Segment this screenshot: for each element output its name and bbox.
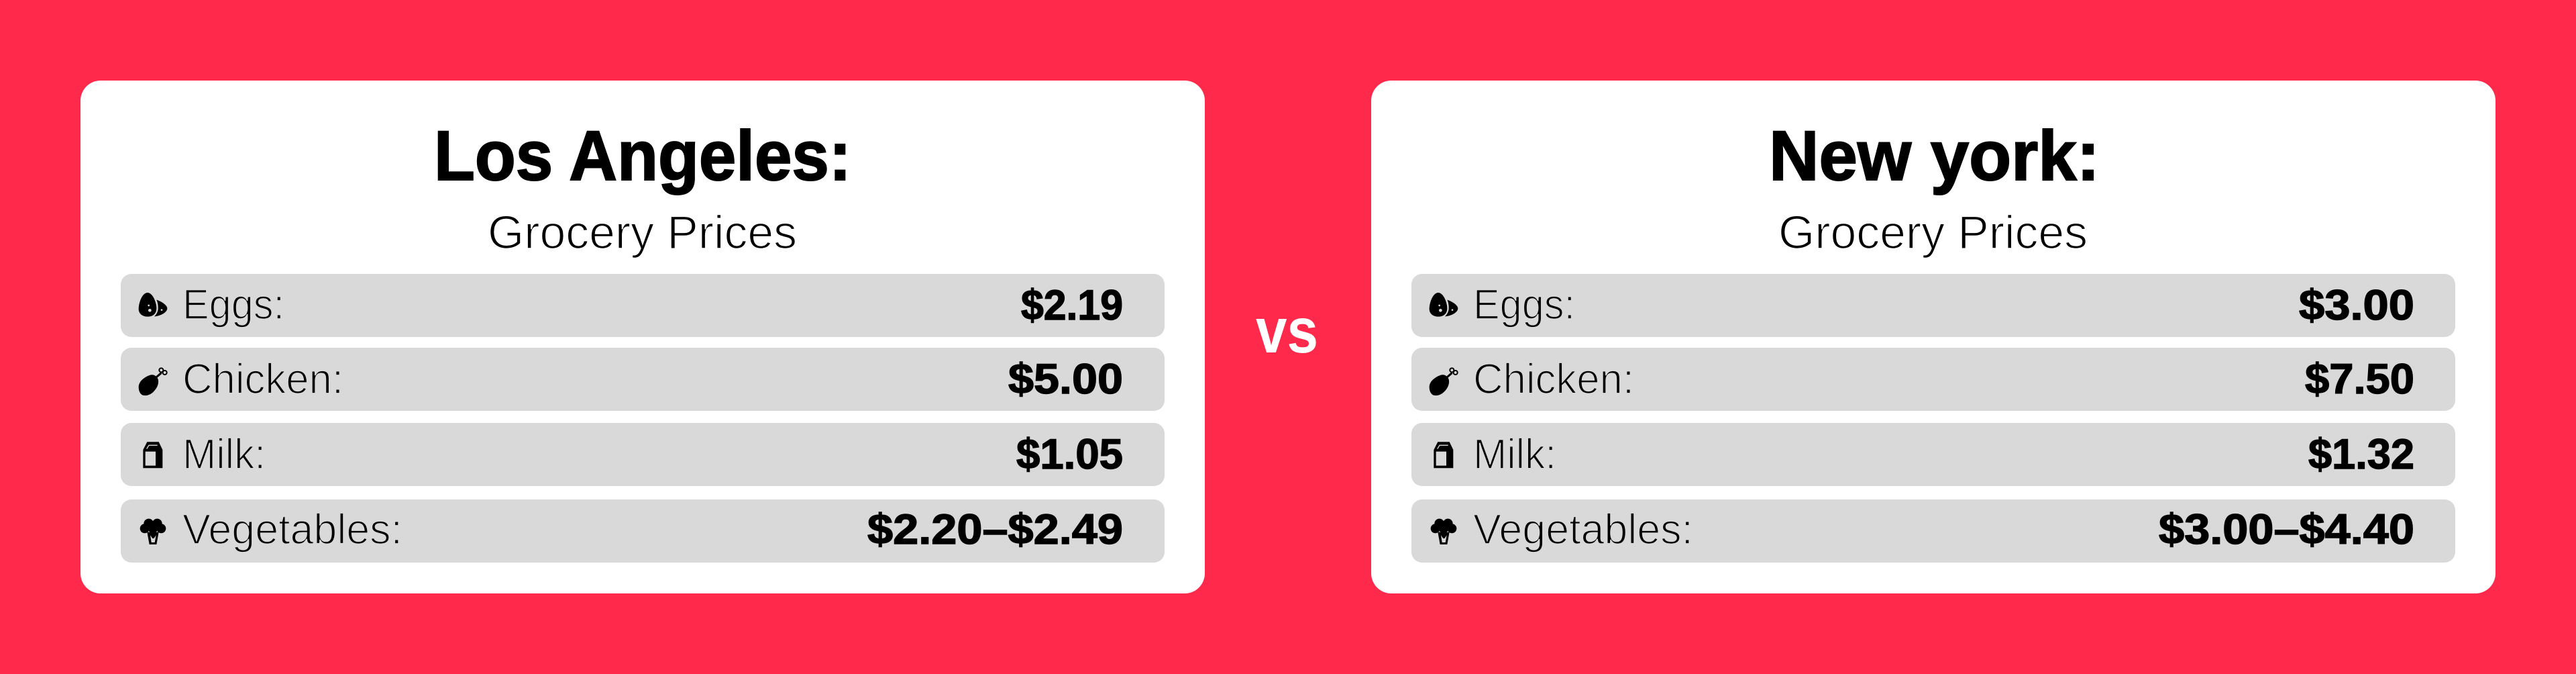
panel: Los Angeles grocery prices [80,81,1205,593]
price: Milk: $1.32 [2308,431,2414,478]
price: Milk: $1.05 [1016,431,1123,478]
row: milk [121,423,1165,486]
row: vegetables [121,499,1165,563]
icon: eggs [139,293,167,317]
icon: broccoli [1431,519,1456,544]
row: eggs [1411,274,2455,337]
subheading: Grocery Prices: Grocery Prices [488,206,797,258]
label: Eggs: Eggs: [182,281,284,328]
label: Milk: Milk: [1473,431,1556,478]
price: Eggs: $3.00 [2299,282,2414,329]
versus label: vs [1256,295,1318,367]
row: vegetables [1411,499,2455,563]
heading: New york: New york: [1769,117,2100,195]
row: chicken [121,348,1165,411]
icon: milk carton [1434,442,1453,468]
row: milk [1411,423,2455,486]
icon: broccoli [140,519,166,544]
price: Vegetables: $3.00–$4.40 [2159,506,2414,553]
panel: New York grocery prices [1371,81,2496,593]
icon: chicken leg [1430,368,1458,395]
icon: chicken leg [139,368,167,395]
icon: eggs [1430,293,1458,317]
heading: Los Angeles: Los Angeles: [434,117,851,195]
subheading: Grocery Prices: Grocery Prices [1778,206,2088,258]
row: eggs [121,274,1165,337]
label: Eggs: Eggs: [1473,281,1575,328]
label: Chicken: Chicken: [182,356,343,403]
row: chicken [1411,348,2455,411]
label: Chicken: Chicken: [1473,356,1634,403]
label: Vegetables: Vegetables: [1473,506,1693,553]
price: Chicken: $7.50 [2305,356,2414,403]
icon: milk carton [143,442,162,468]
label: Vegetables: Vegetables: [182,506,402,553]
price: Chicken: $5.00 [1008,356,1123,403]
price: Vegetables: $2.20–$2.49 [867,506,1123,553]
label: Milk: Milk: [182,431,266,478]
price: Eggs: $2.19 [1021,282,1123,329]
